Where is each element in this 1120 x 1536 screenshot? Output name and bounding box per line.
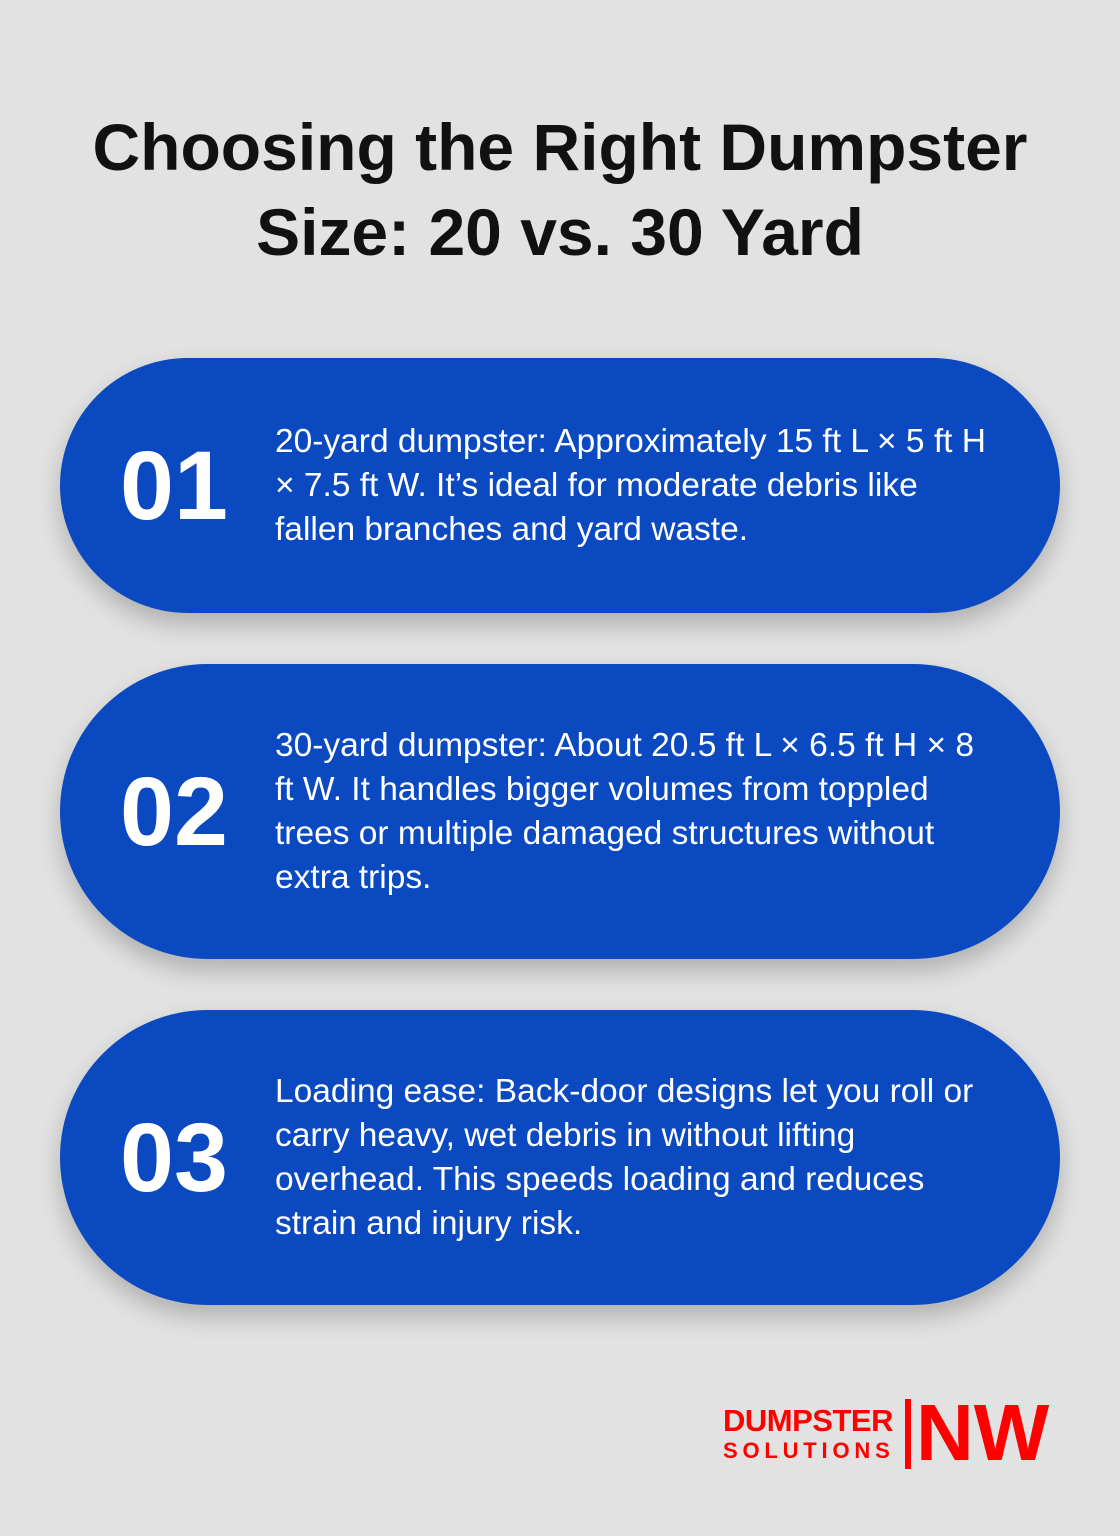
text 02: extra trips. (275, 858, 431, 896)
number 03: 03 (120, 1102, 228, 1212)
text 03: carry heavy, wet debris in without lifting (275, 1116, 855, 1154)
text 03: strain and injury risk. (275, 1204, 582, 1242)
panel: 03 (60, 1010, 1060, 1305)
text 03 (275, 1072, 973, 1242)
title (93, 110, 1027, 269)
text 01: fallen branches and yard waste. (275, 510, 748, 548)
logo: SOLUTIONS (723, 1438, 895, 1463)
text 01: 20-yard dumpster: Approximately 15 ft L × 5 ft H (275, 422, 986, 460)
text 02: trees or multiple damaged structures without (275, 814, 934, 852)
text 01: × 7.5 ft W. It’s ideal for moderate debris like (275, 466, 918, 504)
panel: 02 (60, 664, 1060, 959)
logo: NW (916, 1388, 1049, 1477)
number 01: 01 (120, 430, 228, 540)
text 02: ft W. It handles bigger volumes from toppled (275, 770, 929, 808)
text 02 (275, 726, 974, 896)
logo (723, 1388, 1050, 1477)
logo: DUMPSTER (723, 1403, 893, 1438)
title: Choosing the Right Dumpster (93, 110, 1027, 184)
panel: 01 (60, 358, 1060, 613)
text 03: overhead. This speeds loading and reduces (275, 1160, 924, 1198)
text 02: 30-yard dumpster: About 20.5 ft L × 6.5 ft H × 8 (275, 726, 974, 764)
text 03: Loading ease: Back-door designs let you roll or (275, 1072, 973, 1110)
title: Size: 20 vs. 30 Yard (256, 195, 864, 269)
text 01 (275, 422, 986, 548)
number 02: 02 (120, 756, 228, 866)
